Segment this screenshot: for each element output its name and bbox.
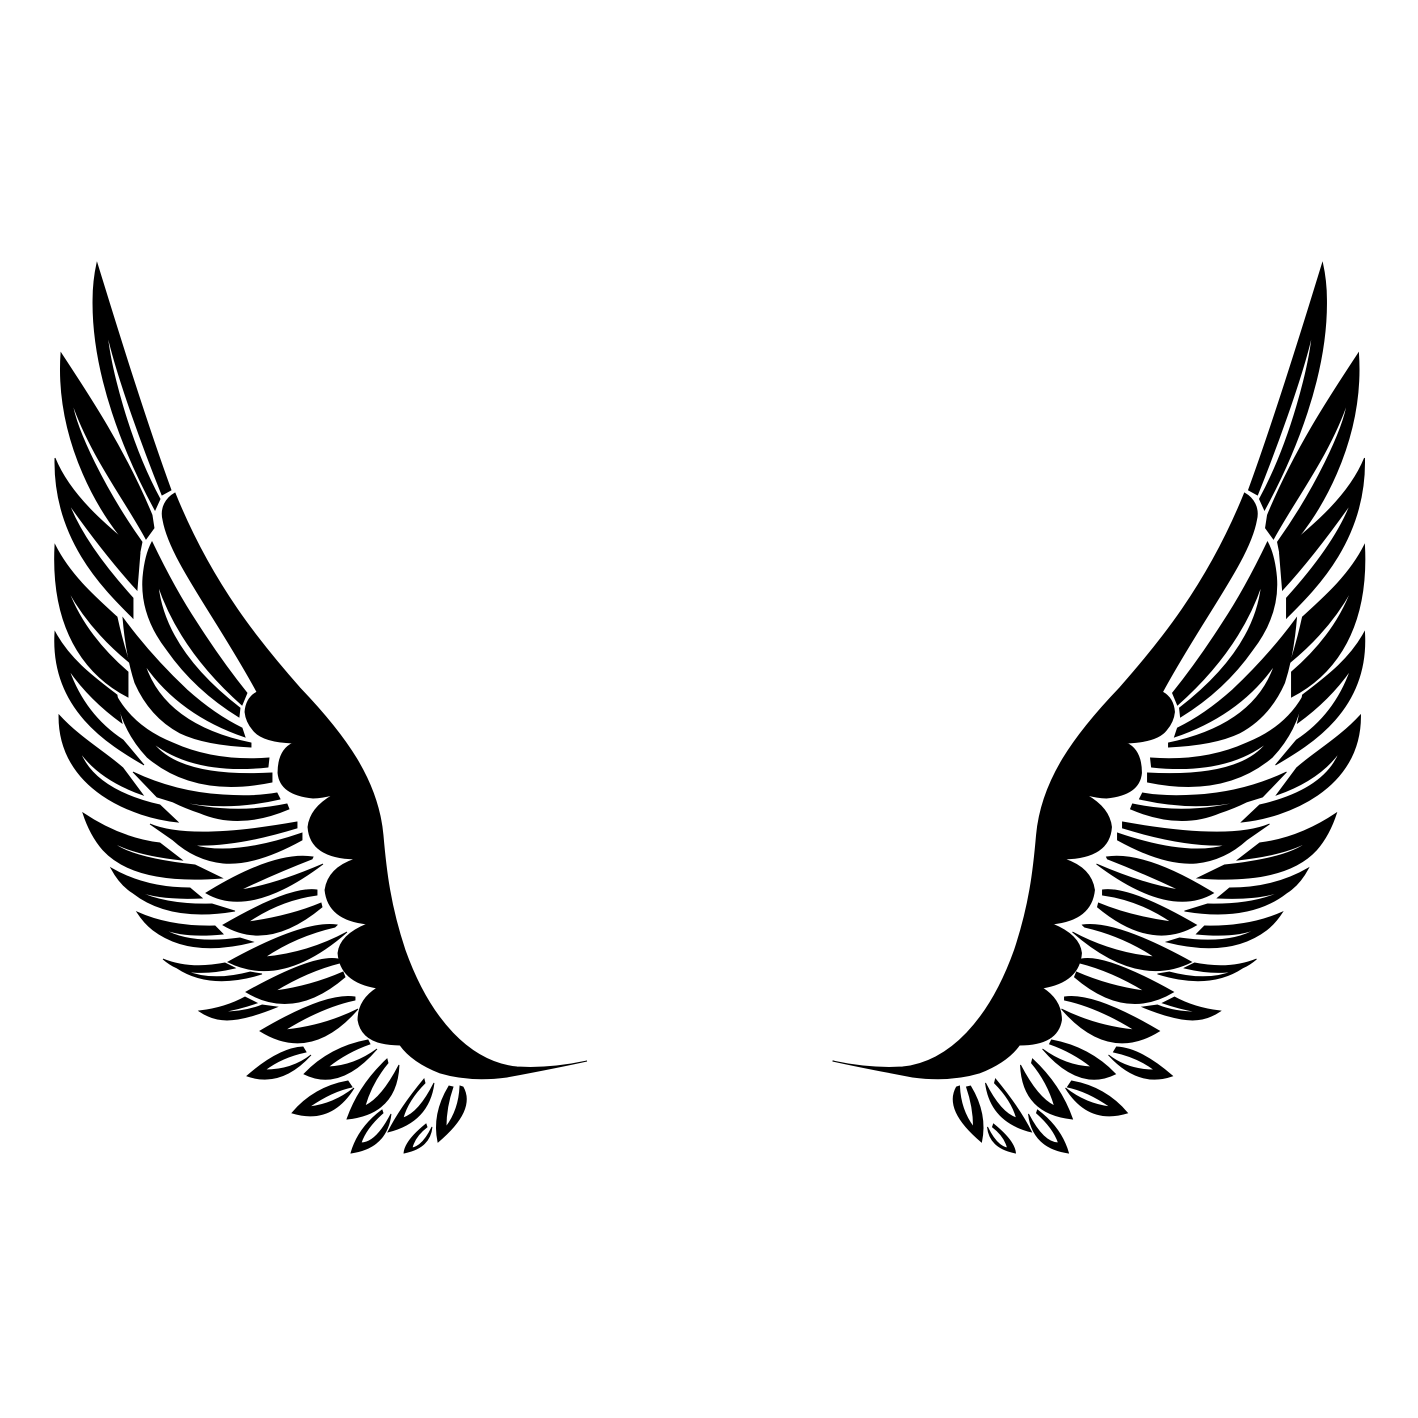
icon: right wing [832,263,1365,1153]
icon: left wing [55,263,587,1153]
